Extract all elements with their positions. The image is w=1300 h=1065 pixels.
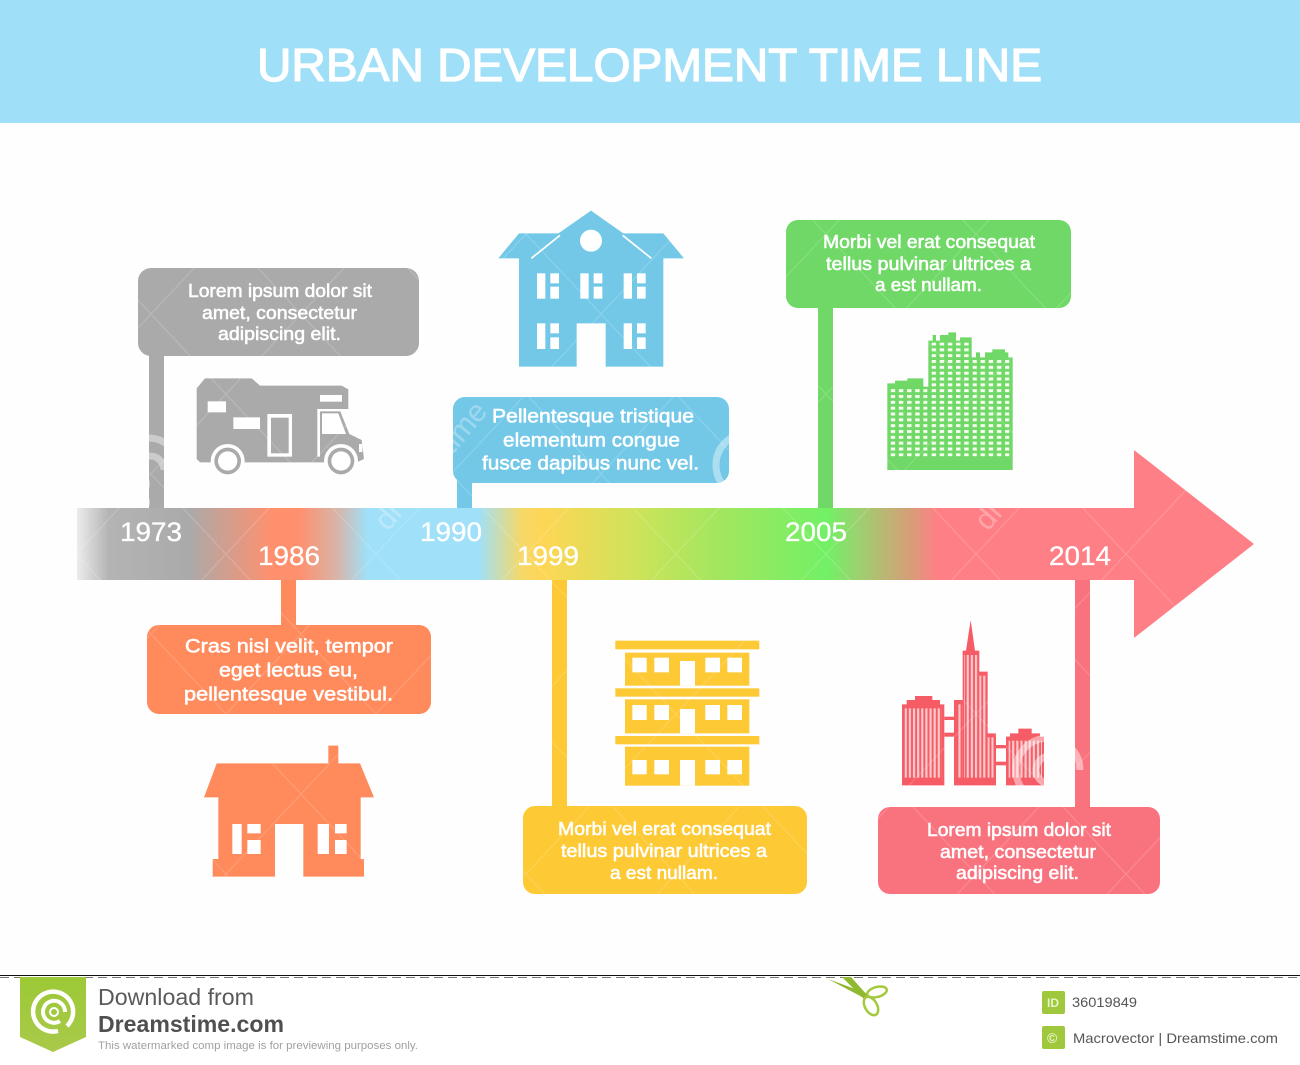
watermark text and swirls (116, 395, 1094, 802)
connector 1973 (149, 350, 164, 508)
milestone 1986 (147, 541, 431, 877)
milestone 1999 (517, 541, 807, 894)
callout 2014: Lorem ipsum dolor sit (927, 820, 1111, 840)
connector 1986 (281, 580, 296, 630)
callout 1990: Pellentesque tristique (492, 406, 694, 428)
callout 1990: elementum congue (503, 430, 680, 452)
callout 1999: tellus pulvinar ultrices a (561, 841, 768, 861)
callout 1973: adipiscing elit. (218, 324, 341, 344)
icon: dreamstime badge (20, 977, 86, 1052)
image id: 36019849 (1072, 994, 1137, 1010)
year 1973: 1973 (120, 517, 182, 547)
callout 2005: tellus pulvinar ultrices a (826, 254, 1032, 274)
connector 1999 (552, 580, 567, 810)
callout 2014: adipiscing elit. (956, 863, 1079, 883)
year 1986: 1986 (258, 541, 320, 571)
milestone 1973 (120, 268, 419, 547)
icon: small house (204, 746, 374, 877)
icon: red skyscrapers (902, 620, 1044, 785)
icon: green skyline (887, 332, 1013, 470)
year 1999: 1999 (517, 541, 579, 571)
year 2014: 2014 (1049, 541, 1111, 571)
milestone 2005 (785, 220, 1071, 547)
download text: Download from (98, 984, 254, 1010)
download text: This watermarked comp image is for previewing purposes only. (98, 1040, 418, 1052)
connector 2005 (818, 303, 833, 508)
callout 1990 (453, 397, 729, 483)
title: URBAN DEVELOPMENT TIME LINE (257, 39, 1042, 91)
copyright credit (1042, 1026, 1278, 1049)
callout 1999 (523, 806, 807, 894)
callout 2005 (786, 220, 1071, 308)
callout 1986: eget lectus eu, (219, 660, 358, 682)
download text: Dreamstime.com (98, 1011, 284, 1037)
download text (98, 984, 418, 1052)
icon: scissors (828, 977, 888, 1018)
callout 2005: a est nullam. (875, 275, 982, 295)
icon: large house (498, 211, 684, 367)
watermark lattice (0, 123, 1300, 963)
callout 1999: Morbi vel erat consequat (558, 819, 771, 839)
year 1990: 1990 (420, 517, 482, 547)
icon: camper van (197, 378, 364, 478)
image id: ID (1047, 996, 1059, 1010)
year 2005: 2005 (785, 517, 847, 547)
callout 1986: pellentesque vestibul. (184, 684, 393, 706)
callout 1990: fusce dapibus nunc vel. (482, 452, 699, 474)
callout 2005: Morbi vel erat consequat (823, 232, 1035, 252)
callout 2014 (878, 807, 1160, 894)
copyright credit: © (1047, 1030, 1058, 1046)
watermark text and swirls: dreamstime (368, 395, 494, 536)
header band (0, 0, 1300, 123)
watermark text and swirls: dreamstime (968, 395, 1094, 536)
callout 1999: a est nullam. (610, 863, 718, 883)
milestone 1990 (420, 211, 729, 547)
timeline arrow (77, 450, 1254, 638)
footer strip (0, 975, 1300, 1065)
connector 1990 (457, 478, 472, 508)
milestone 2014 (878, 541, 1160, 894)
connector 2014 (1075, 580, 1090, 812)
icon: apartment block (615, 641, 759, 786)
callout 1973: amet, consectetur (202, 303, 357, 323)
callout 2014: amet, consectetur (940, 842, 1096, 862)
callout 1986 (147, 625, 431, 714)
callout 1986: Cras nisl velit, tempor (185, 636, 394, 658)
image id (1042, 991, 1137, 1014)
callout 1973 (138, 268, 419, 356)
copyright credit: Macrovector | Dreamstime.com (1073, 1030, 1278, 1046)
callout 1973: Lorem ipsum dolor sit (188, 281, 372, 301)
